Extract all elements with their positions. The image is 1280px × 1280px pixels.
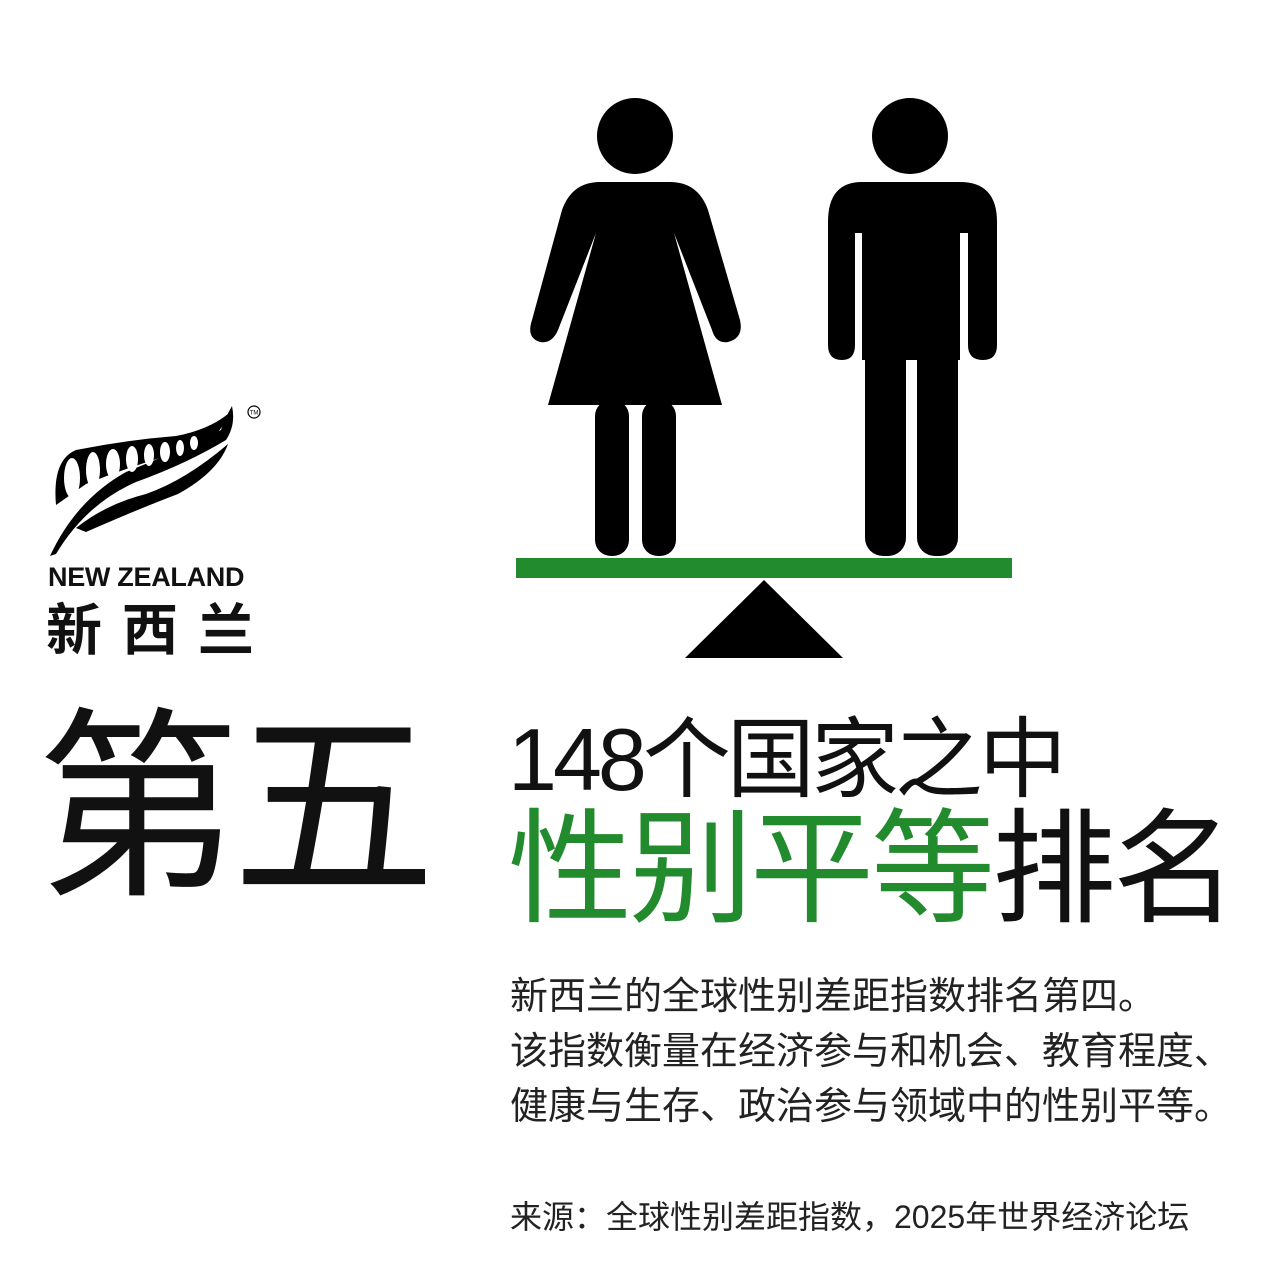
heading: gender equality ranking: 性别平等排名 [508,801,1234,939]
balance beam [516,558,1012,578]
illustration: figures on balance [516,98,1012,658]
heading: subtitle: 148个国家之中 [508,710,1063,809]
logo text: NEW ZEALAND [48,562,244,592]
icon: fern [50,406,233,556]
logo: New Zealand fern: TM [250,410,258,416]
logo: New Zealand fern [46,405,274,662]
source: 来源：全球性别差距指数，2025年世界经济论坛 [510,1199,1189,1235]
text block: description: 新西兰的全球性别差距指数排名第四。 [510,976,1156,1018]
icon: man [828,98,997,556]
logo: New Zealand fern: 新西兰 [46,599,274,662]
icon: woman [530,98,741,556]
heading: rank: 第五 [36,695,428,923]
text block: description [510,976,1232,1128]
text block: description: 该指数衡量在经济参与和机会、教育程度、 [510,1031,1232,1073]
balance fulcrum [685,580,843,658]
text block: description: 健康与生存、政治参与领域中的性别平等。 [510,1086,1232,1128]
icon: trademark [248,406,260,418]
